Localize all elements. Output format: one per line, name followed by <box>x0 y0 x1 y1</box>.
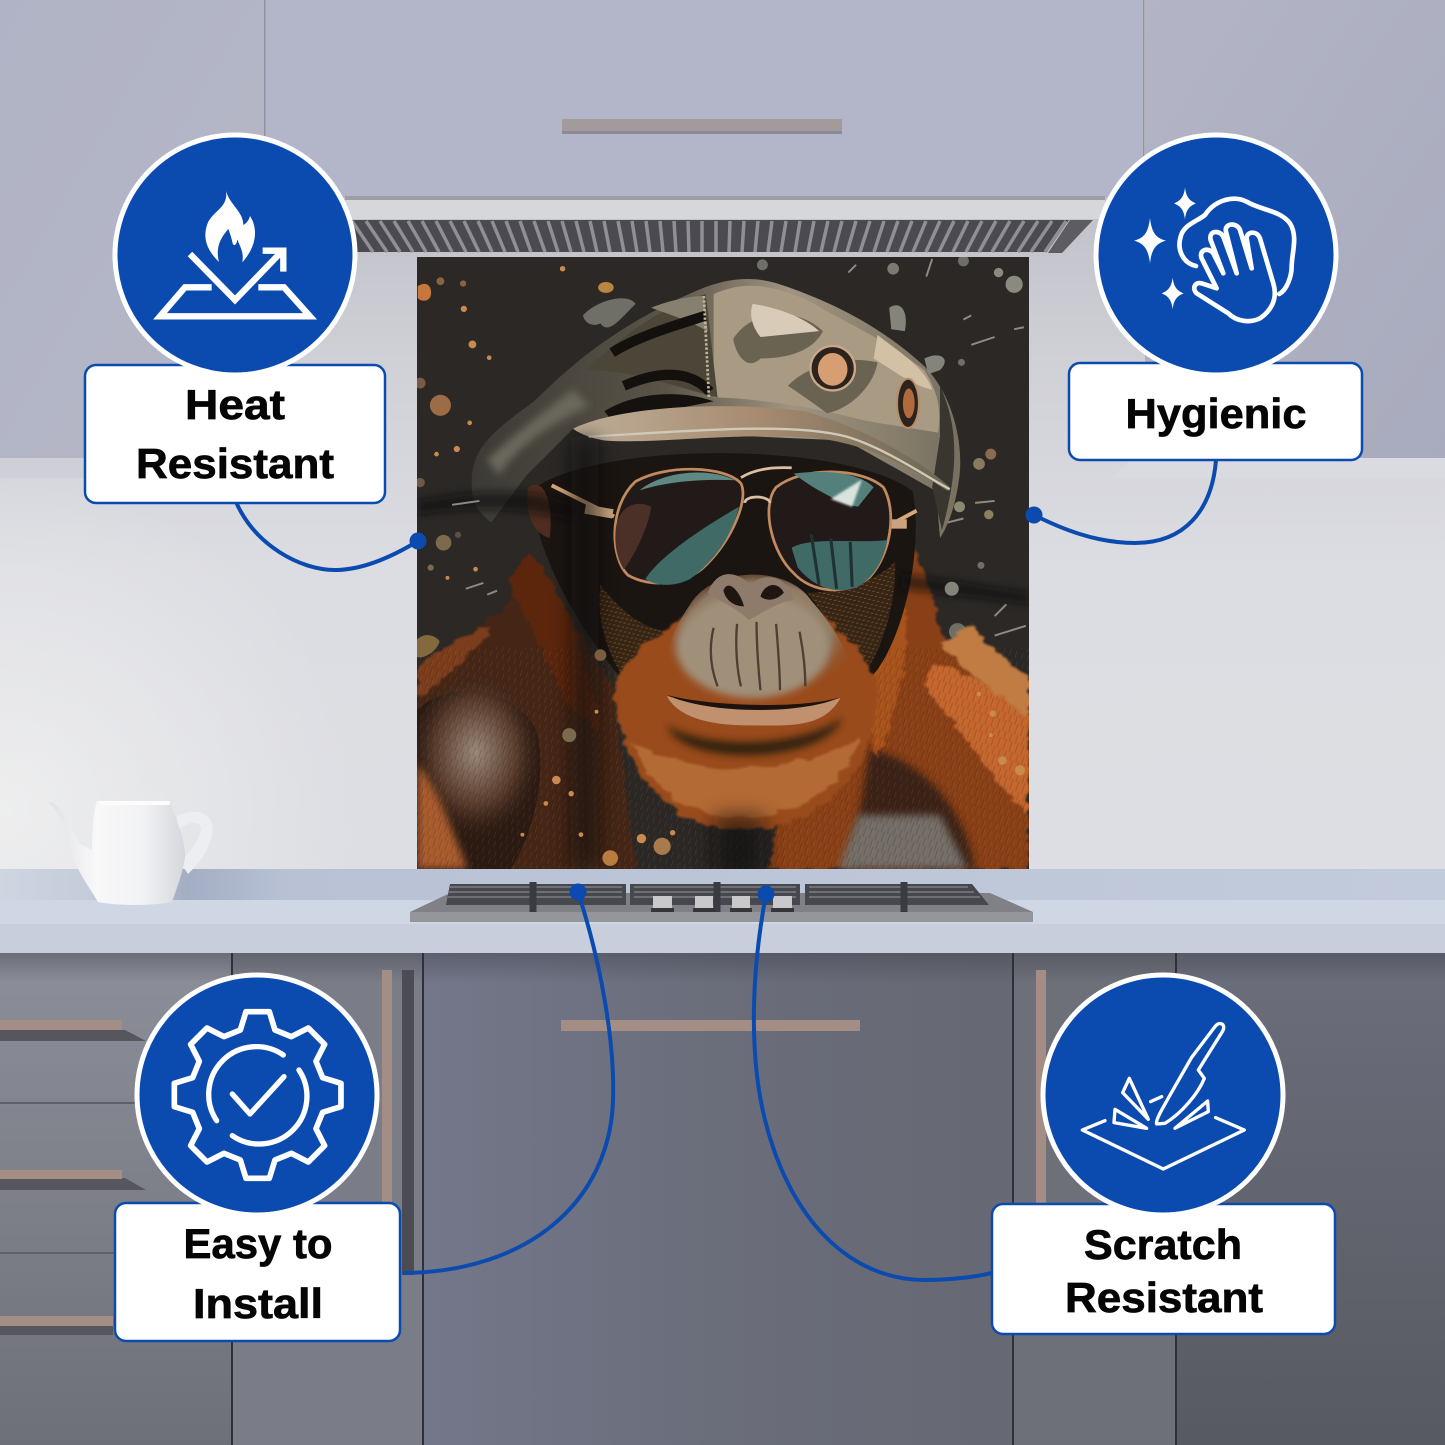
connector: heat resistant <box>236 502 426 570</box>
paint splatter <box>415 266 1025 866</box>
bridge <box>741 468 792 503</box>
muzzle <box>666 574 852 699</box>
beard <box>614 608 878 831</box>
icon: hand wiping with sparkles <box>1134 187 1294 321</box>
heading line 2: Install <box>193 1280 323 1327</box>
badge circle <box>1043 975 1283 1215</box>
icon: flame on surface with arrow <box>160 191 310 316</box>
heading line 2: Resistant <box>136 440 334 487</box>
callout: scratch resistant <box>992 975 1335 1334</box>
aviator sunglasses <box>552 468 917 590</box>
camouflage cap <box>472 279 960 538</box>
glass reflections <box>417 437 1029 881</box>
heading: Hygienic <box>1126 390 1306 437</box>
connector: scratch resistant <box>754 886 992 1280</box>
heading line 2: Resistant <box>1065 1274 1263 1321</box>
teapot <box>48 801 213 905</box>
callout: hygienic <box>1069 135 1362 460</box>
orangutan body <box>411 507 1029 869</box>
upper cabinets <box>0 0 1445 478</box>
lower cabinets <box>0 953 1445 1445</box>
connector: easy to install <box>403 884 613 1273</box>
grey splatter <box>452 255 1026 640</box>
countertop <box>0 869 1445 954</box>
badge circle <box>1096 135 1336 375</box>
cooktop <box>410 882 1033 922</box>
right lens <box>769 472 891 590</box>
heading: Heat <box>185 381 285 428</box>
wall <box>0 190 1445 880</box>
label box <box>992 1204 1335 1334</box>
cap buttons <box>810 346 855 390</box>
orange paint burst <box>940 626 1029 718</box>
heading: Easy to <box>184 1220 332 1267</box>
range hood <box>345 196 1105 257</box>
label box <box>1069 363 1362 460</box>
label box <box>115 1203 400 1341</box>
cap visor <box>573 406 950 491</box>
icon: gear with check mark <box>174 1012 341 1178</box>
callout: heat resistant <box>85 135 385 503</box>
icon: knife scratching surface <box>1082 1024 1244 1169</box>
mouth <box>667 695 840 726</box>
panel: orangutan artwork <box>411 255 1029 881</box>
ear <box>527 485 551 538</box>
face dark mask <box>530 453 916 686</box>
left lens <box>615 469 743 583</box>
badge circle <box>115 135 355 375</box>
heading: Scratch <box>1084 1221 1242 1268</box>
connector: hygienic <box>1026 460 1216 543</box>
label box <box>85 365 385 503</box>
callout: easy to install <box>115 975 400 1341</box>
badge circle <box>137 975 377 1215</box>
nose <box>708 574 794 620</box>
